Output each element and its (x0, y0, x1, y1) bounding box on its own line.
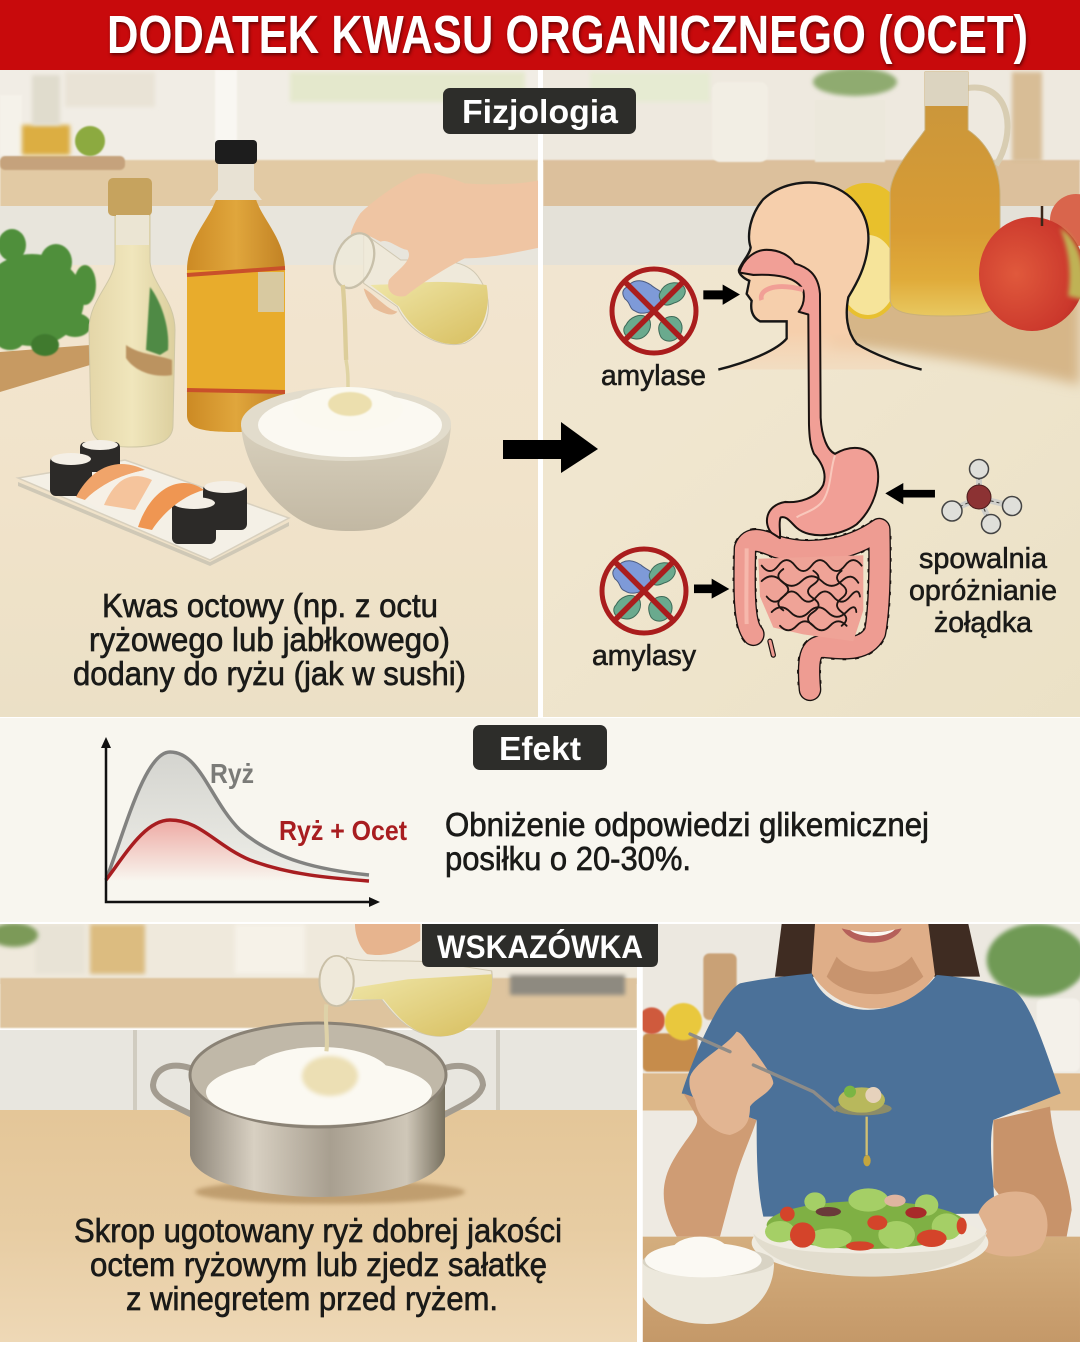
left arm (664, 1093, 757, 1237)
arrow: amylase to mouth (703, 285, 740, 305)
vinegar stream (326, 1004, 327, 1051)
salad plate (752, 1188, 988, 1277)
kitchen background (0, 923, 637, 1342)
rice bowl (643, 1237, 774, 1324)
sushi plate (18, 440, 289, 566)
caption: how to apply vinegar: octem ryżowym lub zjedz sałatkę (90, 1246, 547, 1283)
apple (979, 194, 1080, 331)
fingers under carafe (364, 288, 397, 315)
teeth (850, 929, 895, 936)
hand holding carafe (355, 924, 420, 955)
text: effect description: Obniżenie odpowiedzi glikemicznej (445, 806, 929, 843)
bottle: apple vinegar (187, 140, 285, 432)
panel: effect band (0, 718, 1080, 922)
vinegar carafe and hand (319, 924, 492, 1051)
divider between physiology panels (538, 70, 542, 718)
woman (664, 924, 1072, 1237)
digestive system illustration (694, 183, 935, 689)
bottle of apple vinegar (890, 72, 1008, 316)
hand on plate (978, 1191, 1048, 1256)
text: effect description: posiłku o 20-30%. (445, 840, 691, 877)
chopping board with parsley (0, 229, 96, 392)
arrow: slows stomach emptying (885, 483, 935, 504)
small intestine (758, 555, 863, 641)
caption: acetic acid added to rice: Kwas octowy (np. z octu (102, 587, 438, 624)
caption: acetic acid added to rice: ryżowego lub jabłkowego) (89, 621, 450, 658)
right arm (993, 1107, 1072, 1237)
heading: Efekt (473, 725, 607, 770)
hand (351, 173, 540, 296)
arrow: from rice to physiology (503, 422, 598, 473)
label: slows stomach emptying: żołądka (934, 607, 1033, 639)
kitchen background (543, 68, 1080, 717)
neck and face (812, 924, 935, 1009)
icon: blocked amylase bottom (602, 549, 686, 633)
label: amylase: amylase (601, 360, 706, 392)
fork with food and dressing drip (690, 1034, 892, 1166)
smile (842, 928, 902, 943)
esophagus and stomach (739, 250, 878, 538)
caption: acetic acid added to rice (73, 587, 466, 692)
arrow: amylase to intestine (694, 579, 729, 599)
caption: how to apply vinegar (74, 1212, 562, 1317)
heading: Efekt: Efekt (499, 730, 581, 767)
label: rice plus vinegar: Ryż + Ocet (279, 815, 407, 846)
carafe glass body (364, 233, 488, 345)
t-shirt (682, 973, 1061, 1217)
carafe lip (319, 956, 354, 1006)
vinegar stream to rice (346, 360, 348, 388)
caption: how to apply vinegar: Skrop ugotowany ryż dobrej jakości (74, 1212, 562, 1249)
hand pouring vinegar (327, 173, 540, 360)
glycemic response chart (101, 737, 407, 907)
panel: physiology left photo, vinegar poured onto rice (0, 70, 540, 717)
kitchen background (0, 70, 538, 717)
vinegar in carafe (370, 282, 488, 344)
head outline (718, 183, 922, 370)
chin shadow (827, 957, 923, 994)
kitchen background (638, 923, 1080, 1343)
tongue (761, 287, 803, 300)
heading: Fizjologia: Fizjologia (462, 93, 619, 130)
head and neck (718, 183, 922, 370)
heading: Fizjologia (443, 88, 636, 134)
panel: tip, vinegar on cooked rice in pot (0, 923, 637, 1342)
carafe lip (333, 232, 376, 290)
hand with fork (689, 1032, 773, 1135)
caption: acetic acid added to rice: dodany do ryżu (jak w sushi) (73, 655, 466, 692)
large intestine (745, 529, 880, 689)
label: slows stomach emptying: spowalnia (919, 543, 1048, 575)
label: slows stomach emptying (909, 543, 1057, 639)
label: rice: Ryż (210, 758, 254, 789)
heading: Wskazowka: WSKAZÓWKA (437, 929, 643, 965)
text: effect description (445, 806, 929, 877)
caption: how to apply vinegar: z winegretem przed ryżem. (126, 1280, 498, 1317)
panel: woman eating salad before rice (638, 923, 1080, 1343)
rice bowl (241, 387, 451, 531)
label: slows stomach emptying: opróżnianie (909, 575, 1057, 607)
pot with rice (153, 1023, 483, 1204)
label: amylasy: amylasy (592, 640, 696, 672)
vinegar stream (343, 285, 346, 360)
lemon (844, 183, 892, 319)
panel: physiology right, digestive system diagram (543, 68, 1080, 717)
icon: acid molecule (942, 460, 1022, 534)
hair (775, 924, 980, 977)
header bar (0, 0, 1080, 70)
vinegar in carafe (351, 974, 492, 1036)
icon: blocked amylase top (612, 269, 696, 353)
bottle: rice vinegar (89, 178, 175, 447)
